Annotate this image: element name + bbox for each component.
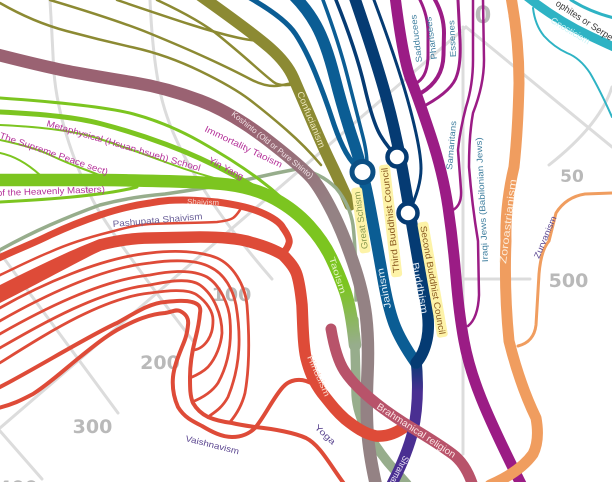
label: buddhism: Buddhism bbox=[409, 261, 430, 315]
pharisees branch bbox=[421, 0, 444, 93]
year 100: 100 bbox=[212, 284, 251, 306]
zoroastrianism bbox=[490, 0, 612, 482]
label: yoga: Yoga bbox=[313, 422, 338, 447]
fan line 4 bbox=[0, 281, 222, 378]
label: gnosticism: Gnosticism bbox=[549, 15, 592, 46]
gnosticism band bbox=[525, 0, 612, 48]
shramana band bbox=[391, 358, 417, 482]
confucianism branches bbox=[0, 0, 350, 205]
taoism trunk bbox=[0, 180, 355, 345]
heavenly masters branch bbox=[0, 187, 137, 202]
shaivism arch bbox=[0, 200, 289, 259]
label: second buddhist council: Second Buddhist Council bbox=[418, 225, 447, 335]
label: koshinto: Koshinto (Old or Pure Shinto) bbox=[230, 110, 315, 181]
label: third buddhist council bbox=[379, 164, 402, 278]
label: taoism: Taoism bbox=[327, 256, 348, 295]
third council node bbox=[388, 148, 406, 166]
label: confucianism: Confucianism bbox=[295, 90, 327, 149]
label: vaishnavism: Vaishnavism bbox=[185, 433, 240, 456]
jainism bbox=[250, 0, 416, 363]
fan line 5 bbox=[0, 291, 213, 364]
judaism bbox=[395, 0, 522, 482]
samaritans branch bbox=[453, 0, 473, 210]
label: third buddhist council: Third Buddhist Council bbox=[380, 167, 402, 274]
label: iraqi jews: Iraqi Jews (Babilonian Jews) bbox=[473, 137, 490, 262]
sage line bbox=[0, 169, 407, 482]
gnosticism bbox=[525, 0, 612, 117]
hinduism bbox=[0, 200, 406, 482]
label: jainism: Jainism bbox=[375, 267, 394, 310]
label: essenes: Essenes bbox=[446, 20, 458, 57]
label: hinduism: Hinduism bbox=[305, 354, 332, 398]
metaphysical branch bbox=[0, 125, 230, 182]
fan line 2 bbox=[0, 261, 239, 417]
sadducees branch bbox=[418, 0, 428, 82]
label: zoroastrianism: Zoroastrianism bbox=[498, 179, 519, 264]
taoism bbox=[0, 98, 355, 345]
ancient israelite trunk bbox=[395, 0, 522, 482]
label: sadducees: Sadducees bbox=[408, 14, 424, 63]
hinduism trunk bbox=[0, 237, 406, 436]
label: pashupata shaivism: Pashupata Shaivism bbox=[112, 211, 203, 229]
brahmanical religion band bbox=[331, 329, 473, 482]
jainism trunk bbox=[290, 0, 416, 363]
label: samaritans: Samaritans bbox=[444, 120, 458, 170]
year 300: 300 bbox=[73, 416, 112, 438]
label: shaivism: Shaivism bbox=[187, 197, 219, 207]
koshinto band bbox=[0, 54, 376, 482]
label: pharisees: Pharisees bbox=[423, 16, 439, 60]
label: supreme peace: The Supreme Peace sect) bbox=[0, 130, 109, 177]
second council node bbox=[398, 204, 418, 222]
yin yang branch bbox=[0, 112, 300, 220]
pashupata branch bbox=[0, 210, 240, 276]
year 500: 500 bbox=[549, 270, 588, 292]
zurvanism branch bbox=[518, 193, 612, 346]
label: zurvanism: Zurvanism bbox=[532, 214, 558, 260]
year 0: 0 bbox=[475, 1, 491, 29]
buddhism bbox=[336, 0, 428, 363]
zoroastrianism trunk bbox=[490, 0, 537, 482]
year 50: 50 bbox=[560, 167, 584, 187]
iraqi jews branch bbox=[468, 0, 484, 326]
label: yin yang: Yin Yang bbox=[207, 155, 245, 182]
great schism node bbox=[352, 162, 373, 182]
label: immortality taoism: Immortality Taoism bbox=[203, 124, 284, 170]
year 200: 200 bbox=[140, 352, 180, 374]
buddhism trunk bbox=[354, 0, 428, 363]
supreme peace branch bbox=[0, 140, 110, 180]
fan line 3 bbox=[0, 271, 230, 402]
immortality branch bbox=[0, 98, 306, 222]
label: great schism: Great Schism bbox=[352, 191, 370, 250]
confucianism trunk bbox=[198, 0, 350, 205]
fan line 1 bbox=[0, 251, 249, 422]
label: brahmanical religion: Brahmanical religion bbox=[374, 401, 458, 461]
label: metaphysical school: Metaphysical (Hsuan-hsueh) School bbox=[45, 118, 202, 173]
essenes branch bbox=[426, 0, 460, 105]
yoga line bbox=[0, 301, 345, 482]
vaishnavism line bbox=[0, 310, 320, 437]
